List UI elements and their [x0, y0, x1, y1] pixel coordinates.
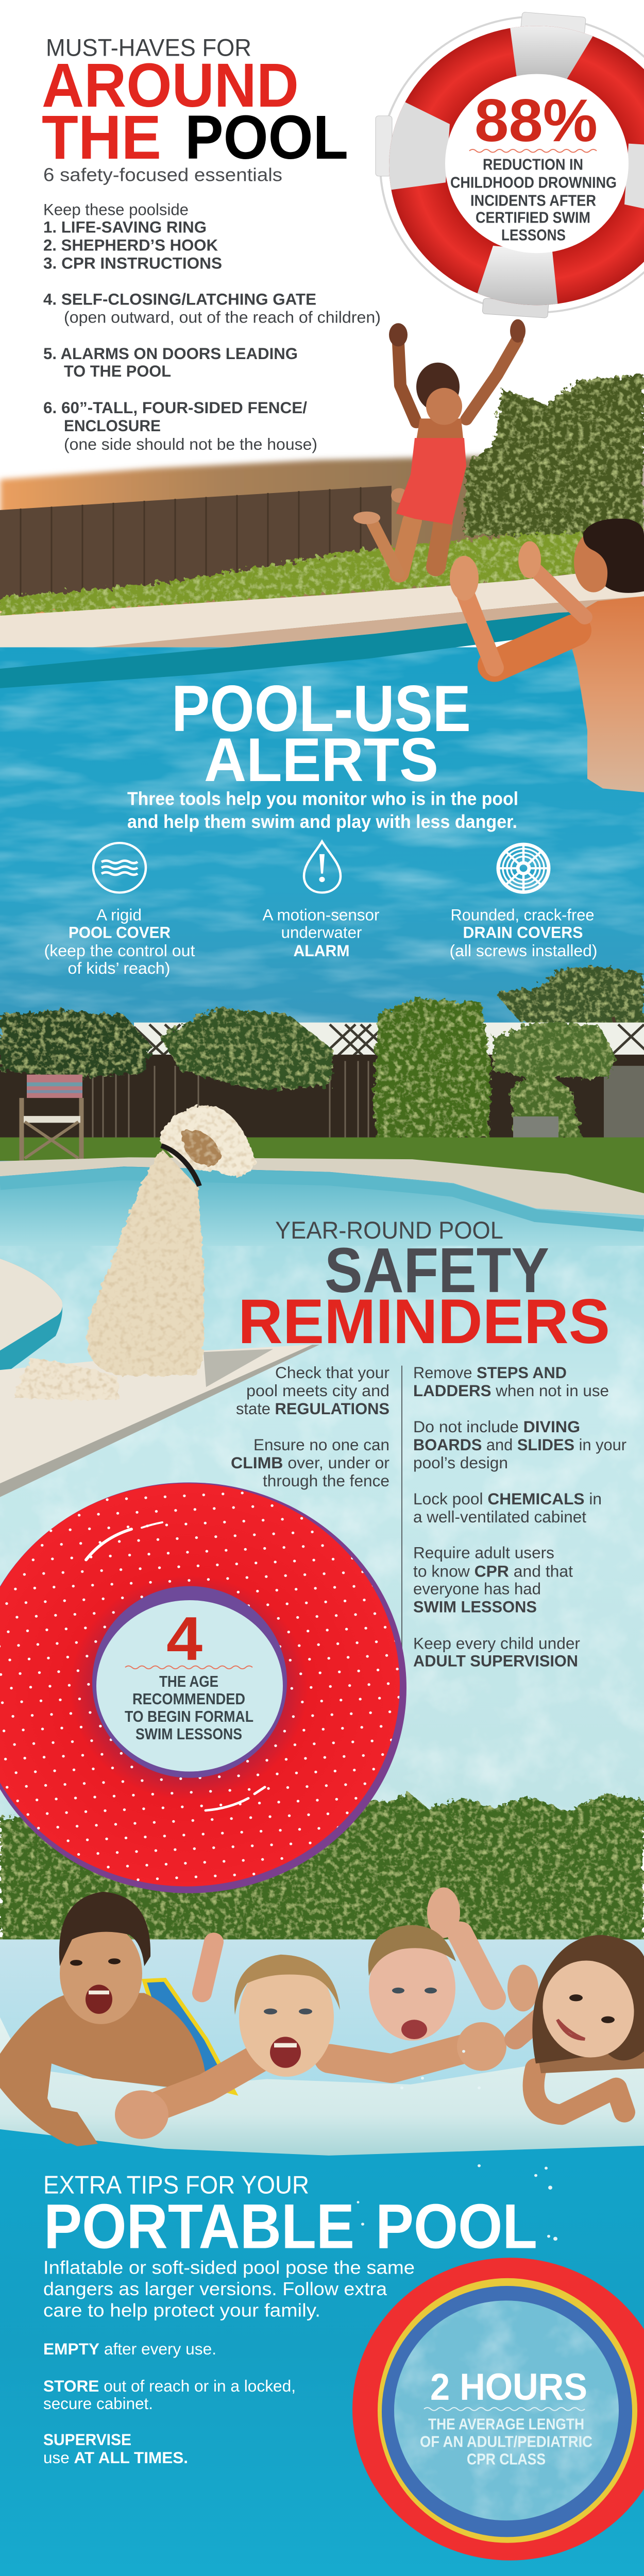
reminders column right: SWIM LESSONS: [413, 1598, 537, 1616]
child 1: [0, 1892, 209, 2144]
background: light pool water: [0, 1166, 644, 1820]
photo: four children in inflatable pool: [0, 1887, 644, 2146]
coping: [0, 596, 644, 669]
tool: drain covers text: Rounded, crack-free: [450, 906, 594, 924]
heading: pool-use alerts: [127, 671, 518, 832]
tool: alarm text: A motion-sensor: [262, 906, 380, 924]
reminders column left: state REGULATIONS: [236, 1400, 389, 1418]
essentials list: ENCLOSURE: [64, 417, 161, 435]
reminders column right: ADULT SUPERVISION: [413, 1652, 578, 1670]
child 3: [368, 1887, 493, 2041]
tool: drain covers text: [449, 906, 597, 960]
stat: 4: 4: [166, 1604, 202, 1673]
stat caption: OF AN ADULT/PEDIATRIC: [420, 2433, 592, 2450]
background: pool water: [0, 608, 644, 1182]
stat caption: RECOMMENDED: [132, 1690, 245, 1708]
reminders column left: CLIMB over, under or: [231, 1454, 389, 1472]
stat caption: CPR CLASS: [467, 2450, 546, 2468]
reminders column right: BOARDS and SLIDES in your: [413, 1436, 626, 1454]
callout: life ring 88%: [376, 12, 644, 318]
reminders column left: Ensure no one can: [253, 1436, 389, 1454]
title block: around the pool: MUST-HAVES FOR: [46, 35, 251, 61]
stat caption: INCIDENTS AFTER: [470, 192, 596, 209]
deck: [0, 566, 644, 656]
reminders column left: through the fence: [263, 1472, 389, 1490]
heading: year-round safety reminders: REMINDERS: [238, 1286, 610, 1357]
title block: around the pool: [42, 35, 348, 185]
essentials list: Keep these poolside: [43, 200, 189, 218]
stat caption: TO BEGIN FORMAL: [125, 1708, 253, 1725]
title block: around the pool: POOL: [185, 103, 348, 172]
portable pool intro: [43, 2257, 415, 2320]
water droplets: [357, 2050, 557, 2241]
reminders column right: Remove STEPS AND: [413, 1364, 567, 1382]
reminders column right: [413, 1364, 626, 1670]
dog collar: [161, 1146, 199, 1186]
stat caption: CERTIFIED SWIM: [476, 209, 590, 226]
essentials list: 3. CPR INSTRUCTIONS: [43, 254, 222, 272]
heading: extra tips portable pool: PORTABLE: [44, 2191, 354, 2262]
lattice fence: [134, 1023, 644, 1057]
tool: pool cover text: [44, 906, 195, 977]
reminders column right: LADDERS when not in use: [413, 1382, 609, 1400]
pool coping: [0, 1157, 644, 1215]
tool: alarm text: underwater: [281, 923, 362, 941]
icon: alarm drop: [304, 841, 341, 892]
background: hedge and portable pool: [0, 1791, 644, 2576]
reminders column left: Check that your: [275, 1364, 389, 1382]
heading: pool-use alerts: Three tools help you monitor who is in the pool: [127, 788, 518, 809]
photo: girl jumping to father: [0, 375, 644, 669]
title block: around the pool: THE: [42, 103, 161, 172]
portable pool tips: [43, 2340, 296, 2467]
child legs and board: [202, 1942, 214, 1993]
callout: red swim ring, age 4: [0, 1482, 406, 1893]
child 1 hand on tube: [15, 2073, 98, 2146]
tool: pool cover text: POOL COVER: [69, 923, 171, 941]
stat caption: [420, 2415, 592, 2468]
reminders column right: Keep every child under: [413, 1634, 580, 1652]
dog: [13, 1106, 257, 1400]
reminders column right: Require adult users: [413, 1544, 554, 1562]
photo: backyard with fence and trees: [0, 966, 644, 1215]
weeping tree: [374, 998, 491, 1139]
essentials list: 1. LIFE-SAVING RING: [43, 218, 207, 236]
portable pool tips: EMPTY after every use.: [43, 2340, 216, 2358]
heading: extra tips portable pool: EXTRA TIPS FOR YOUR: [43, 2171, 309, 2199]
icon: drain cover: [498, 844, 549, 892]
stat caption: [450, 156, 617, 244]
stat caption: CHILDHOOD DROWNING: [450, 174, 617, 191]
bushes right: [464, 375, 644, 535]
essentials list: TO THE POOL: [64, 362, 171, 380]
tool: pool cover text: of kids’ reach): [67, 959, 170, 977]
reminders column right: Lock pool CHEMICALS in: [413, 1490, 602, 1508]
tool: alarm text: ALARM: [294, 942, 349, 960]
director chair: [22, 1075, 82, 1163]
reminders column right: to know CPR and that: [413, 1562, 573, 1580]
essentials list: 4. SELF-CLOSING/LATCHING GATE: [43, 290, 316, 308]
title block: around the pool: AROUND: [42, 50, 299, 120]
essentials list: (one side should not be the house): [64, 435, 317, 453]
essentials list: 6. 60”-TALL, FOUR-SIDED FENCE/: [43, 399, 307, 417]
stat caption: THE AVERAGE LENGTH: [428, 2415, 584, 2433]
title block: around the pool: 6 safety-focused essentials: [43, 164, 282, 185]
heading: pool-use alerts: ALERTS: [204, 725, 438, 794]
portable pool intro: dangers as larger versions. Follow extra: [43, 2279, 387, 2299]
portable pool intro: care to help protect your family.: [43, 2300, 320, 2320]
stat caption: LESSONS: [501, 226, 566, 244]
tool: pool cover text: (keep the control out: [44, 942, 195, 960]
heading: pool-use alerts: and help them swim and play with less danger.: [127, 811, 517, 832]
child 2: [115, 1955, 506, 2139]
heading: extra tips portable pool: [43, 2171, 537, 2262]
stat caption: SWIM LESSONS: [135, 1725, 242, 1743]
lawn: [0, 1138, 644, 1193]
tool: alarm text: [262, 906, 380, 960]
man in pool: [450, 519, 644, 792]
portable pool tips: use AT ALL TIMES.: [43, 2449, 188, 2467]
heading: year-round safety reminders: SAFETY: [325, 1235, 549, 1306]
stat caption: THE AGE: [159, 1673, 218, 1690]
essentials list: 5. ALARMS ON DOORS LEADING: [43, 345, 298, 363]
pool deck: [0, 1259, 319, 1497]
stat caption: REDUCTION IN: [483, 156, 583, 173]
child 4: [507, 1935, 644, 2114]
heading: extra tips portable pool: POOL: [376, 2191, 537, 2262]
stat: 2 hours: 2 HOURS: [430, 2366, 587, 2409]
reminders column left: pool meets city and: [246, 1382, 389, 1400]
girl jumping: [353, 319, 526, 573]
foliage left: [0, 1010, 152, 1078]
tool: drain covers text: (all screws installed): [449, 942, 597, 960]
stat caption: [125, 1673, 253, 1743]
column divider: [401, 1366, 402, 1667]
reminders column right: pool’s design: [413, 1454, 508, 1472]
portable pool tips: secure cabinet.: [43, 2395, 153, 2413]
tool: drain covers text: DRAIN COVERS: [463, 923, 583, 941]
stat: 88%: 88%: [474, 87, 598, 154]
reminders column right: Do not include DIVING: [413, 1418, 580, 1436]
lawn: [0, 528, 644, 617]
reminders column left: [231, 1364, 389, 1490]
callout: kiddie pool, 2 hours: [352, 2258, 644, 2561]
heading: year-round safety reminders: [238, 1217, 610, 1357]
reminders column right: a well-ventilated cabinet: [413, 1508, 586, 1526]
portable pool intro: Inflatable or soft-sided pool pose the same: [43, 2257, 415, 2278]
icon: pool cover waves: [93, 843, 146, 892]
portable pool tips: STORE out of reach or in a locked,: [43, 2377, 296, 2395]
reminders column right: everyone has had: [413, 1580, 541, 1598]
tool: pool cover text: A rigid: [96, 906, 142, 924]
essentials list: 2. SHEPHERD’S HOOK: [43, 236, 218, 254]
portable pool tips: SUPERVISE: [43, 2431, 131, 2449]
essentials list: (open outward, out of the reach of children): [64, 308, 381, 326]
heading: year-round safety reminders: YEAR-ROUND POOL: [275, 1217, 503, 1244]
heading: pool-use alerts: POOL-USE: [172, 671, 471, 745]
essentials list: [43, 200, 381, 453]
